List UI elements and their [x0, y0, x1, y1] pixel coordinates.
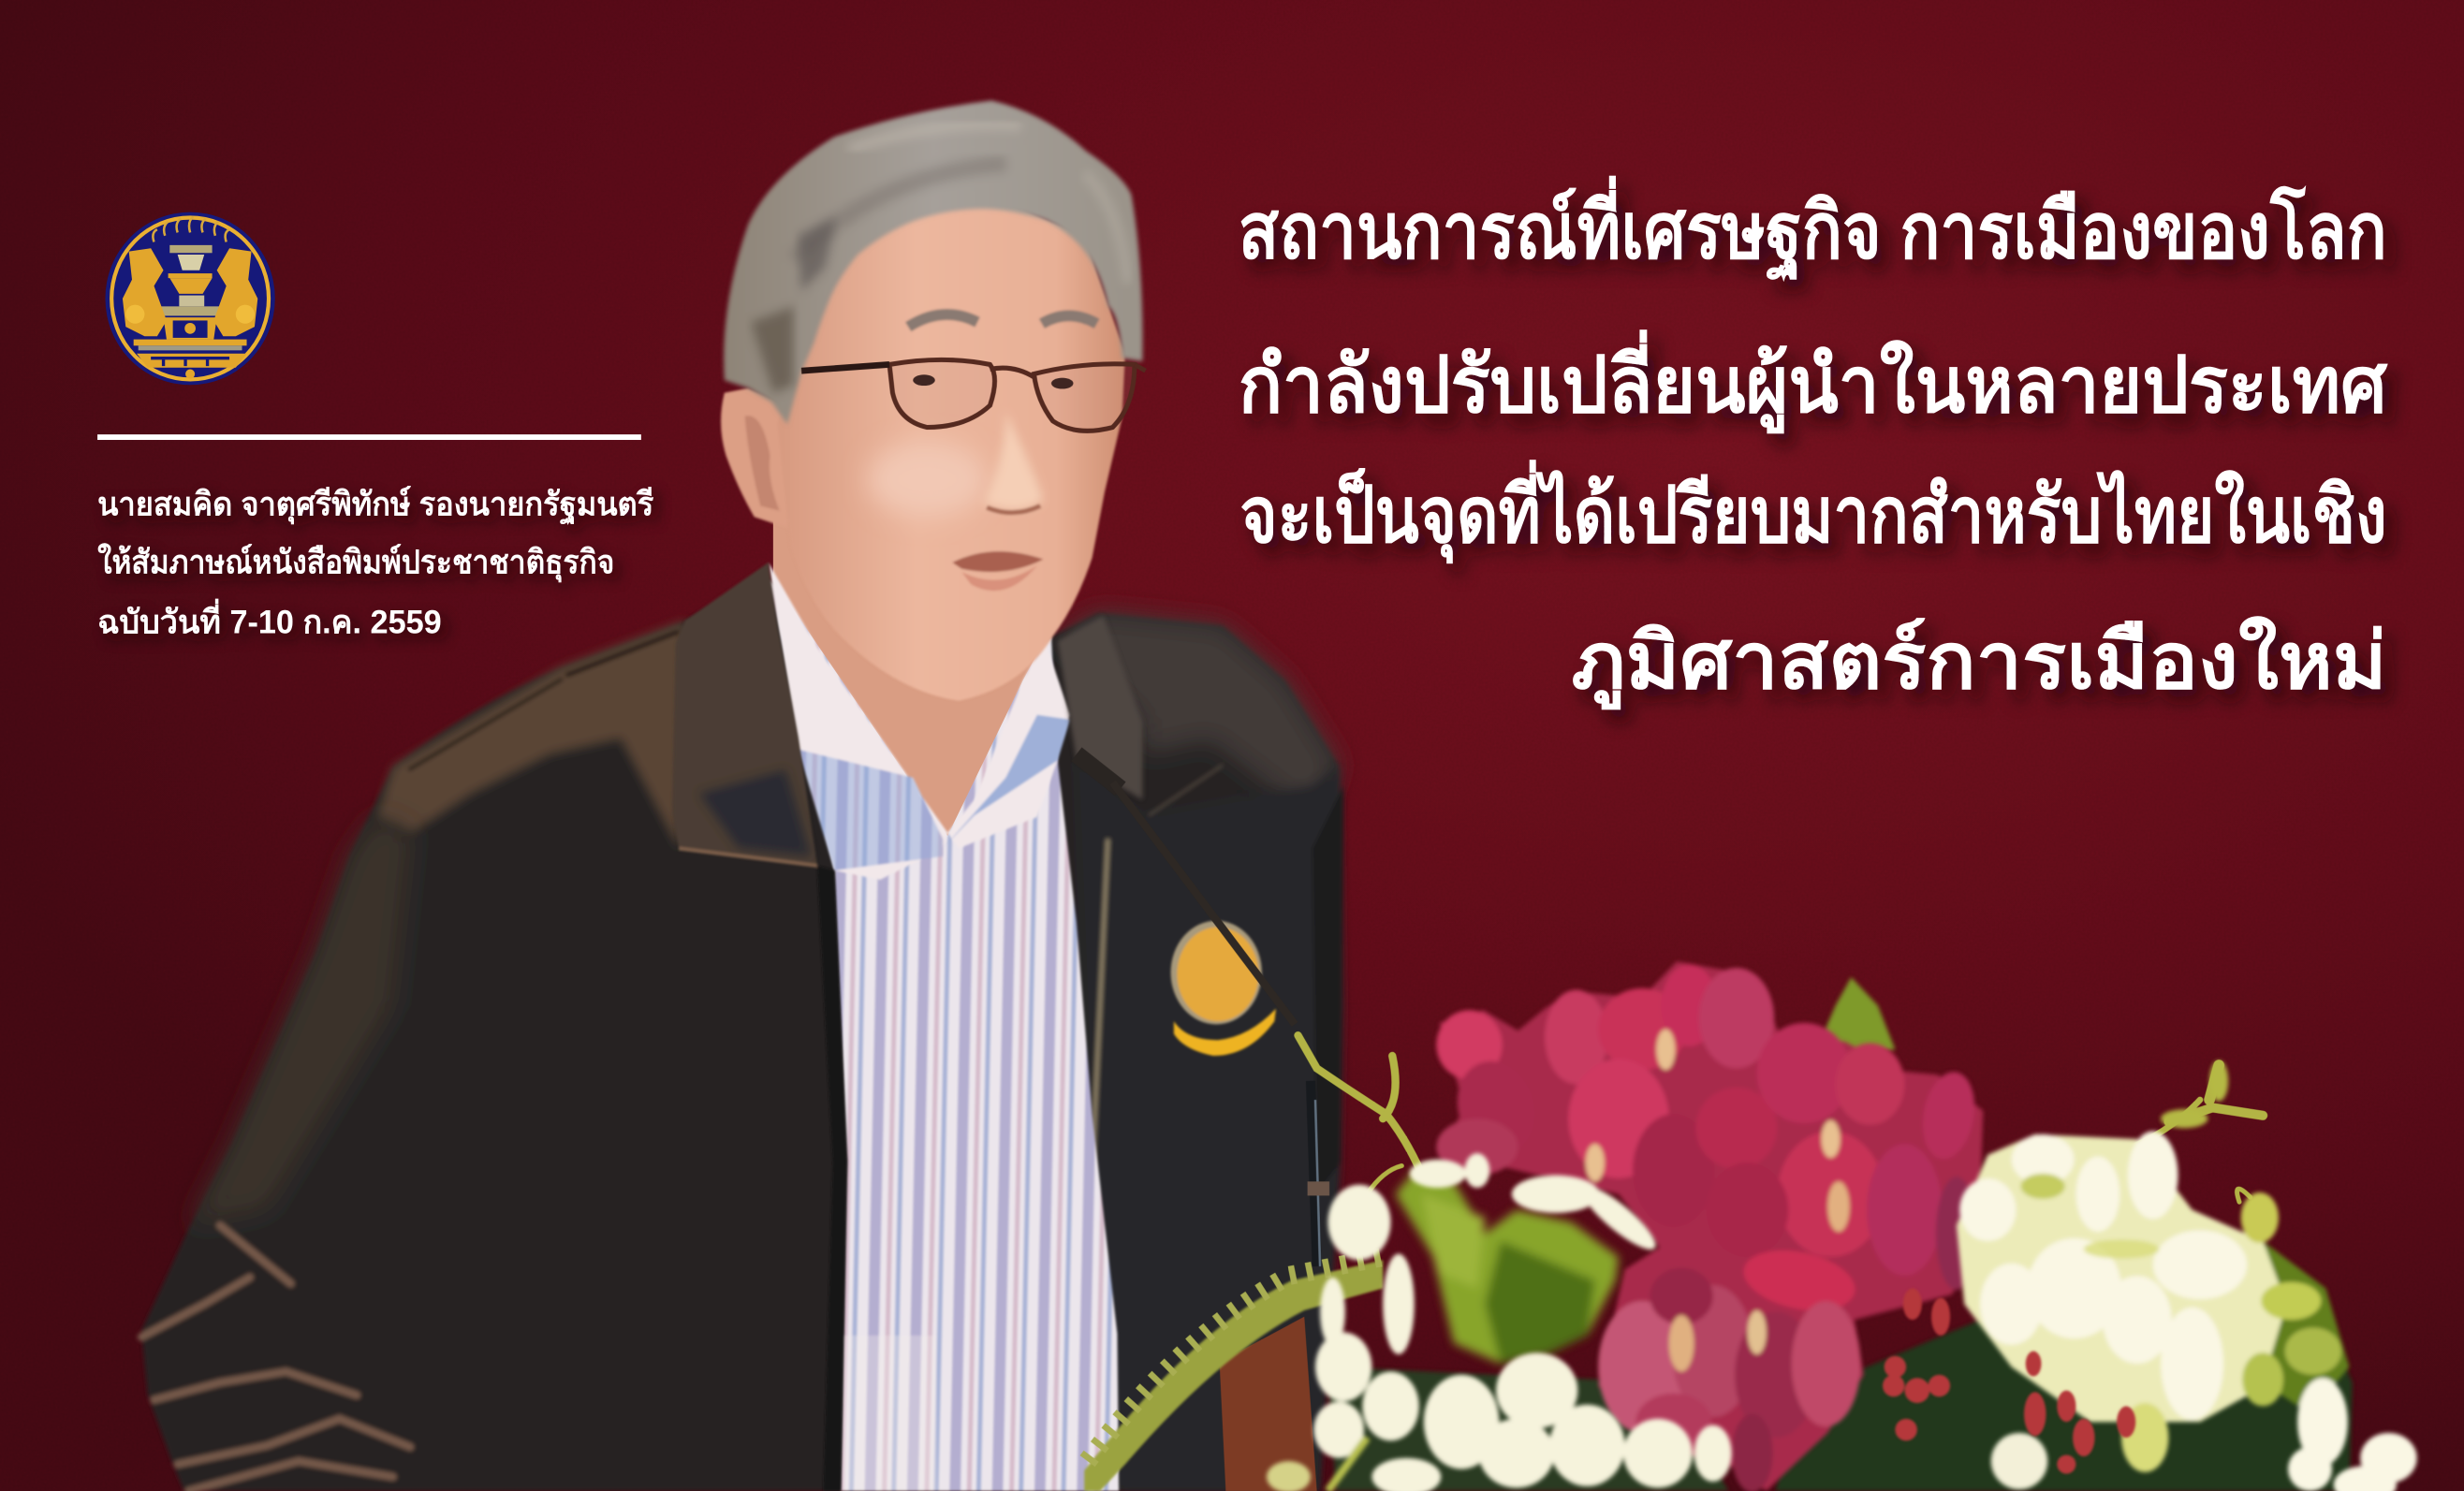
red berries	[1883, 1288, 2135, 1474]
urn on pedestal	[160, 245, 223, 340]
eyes	[913, 374, 1073, 388]
face	[778, 188, 1125, 701]
white orchids right	[1957, 1060, 2417, 1491]
jacket collars	[672, 563, 1142, 1491]
shirt	[769, 579, 1119, 1491]
sleeve wrinkles	[141, 1225, 410, 1491]
shirt collars	[769, 563, 1070, 880]
headline quote: ภูมิศาสตร์การเมืองใหม่	[1572, 616, 2387, 710]
mouth	[952, 551, 1044, 572]
headline quote	[1239, 175, 2388, 710]
ear	[721, 388, 795, 528]
headline quote: กำลังปรับเปลี่ยนผู้นำในหลายประเทศ	[1239, 329, 2388, 434]
emblem: government seal	[105, 212, 275, 385]
neck	[773, 519, 1084, 836]
pink orchids	[1436, 961, 1983, 1491]
podium	[1220, 1317, 1317, 1491]
divider line	[97, 434, 641, 440]
hair	[724, 100, 1143, 424]
white orchids left	[1267, 1153, 1732, 1491]
microphone on stand	[1077, 754, 1329, 1266]
eyebrows	[908, 314, 977, 327]
flower arrangement	[1084, 961, 2417, 1491]
green carnations left	[1396, 1171, 1619, 1364]
jacket body	[141, 579, 1343, 1491]
green tuft top	[1816, 977, 1895, 1053]
yellow chest badge	[1171, 921, 1276, 1056]
glasses	[801, 359, 1146, 431]
green stems	[1298, 1035, 2263, 1202]
lions	[123, 248, 257, 336]
caption: interview source	[97, 486, 653, 640]
photo: speaker in black jacket	[141, 100, 1343, 1491]
head and face	[721, 188, 1125, 701]
flames	[153, 217, 229, 242]
caption: interview source: นายสมคิด จาตุศรีพิทักษ์ รองนายกรัฐมนตรี	[97, 486, 653, 526]
base and lettering band	[134, 340, 247, 379]
fern leaf	[1084, 1257, 1383, 1491]
caption: interview source: ให้สัมภาษณ์หนังสือพิมพ์ประชาชาติธุรกิจ	[97, 543, 614, 583]
dark foliage base	[1327, 1288, 2353, 1491]
caption: interview source: ฉบับวันที่ 7-10 ก.ค. 2559	[97, 598, 442, 640]
